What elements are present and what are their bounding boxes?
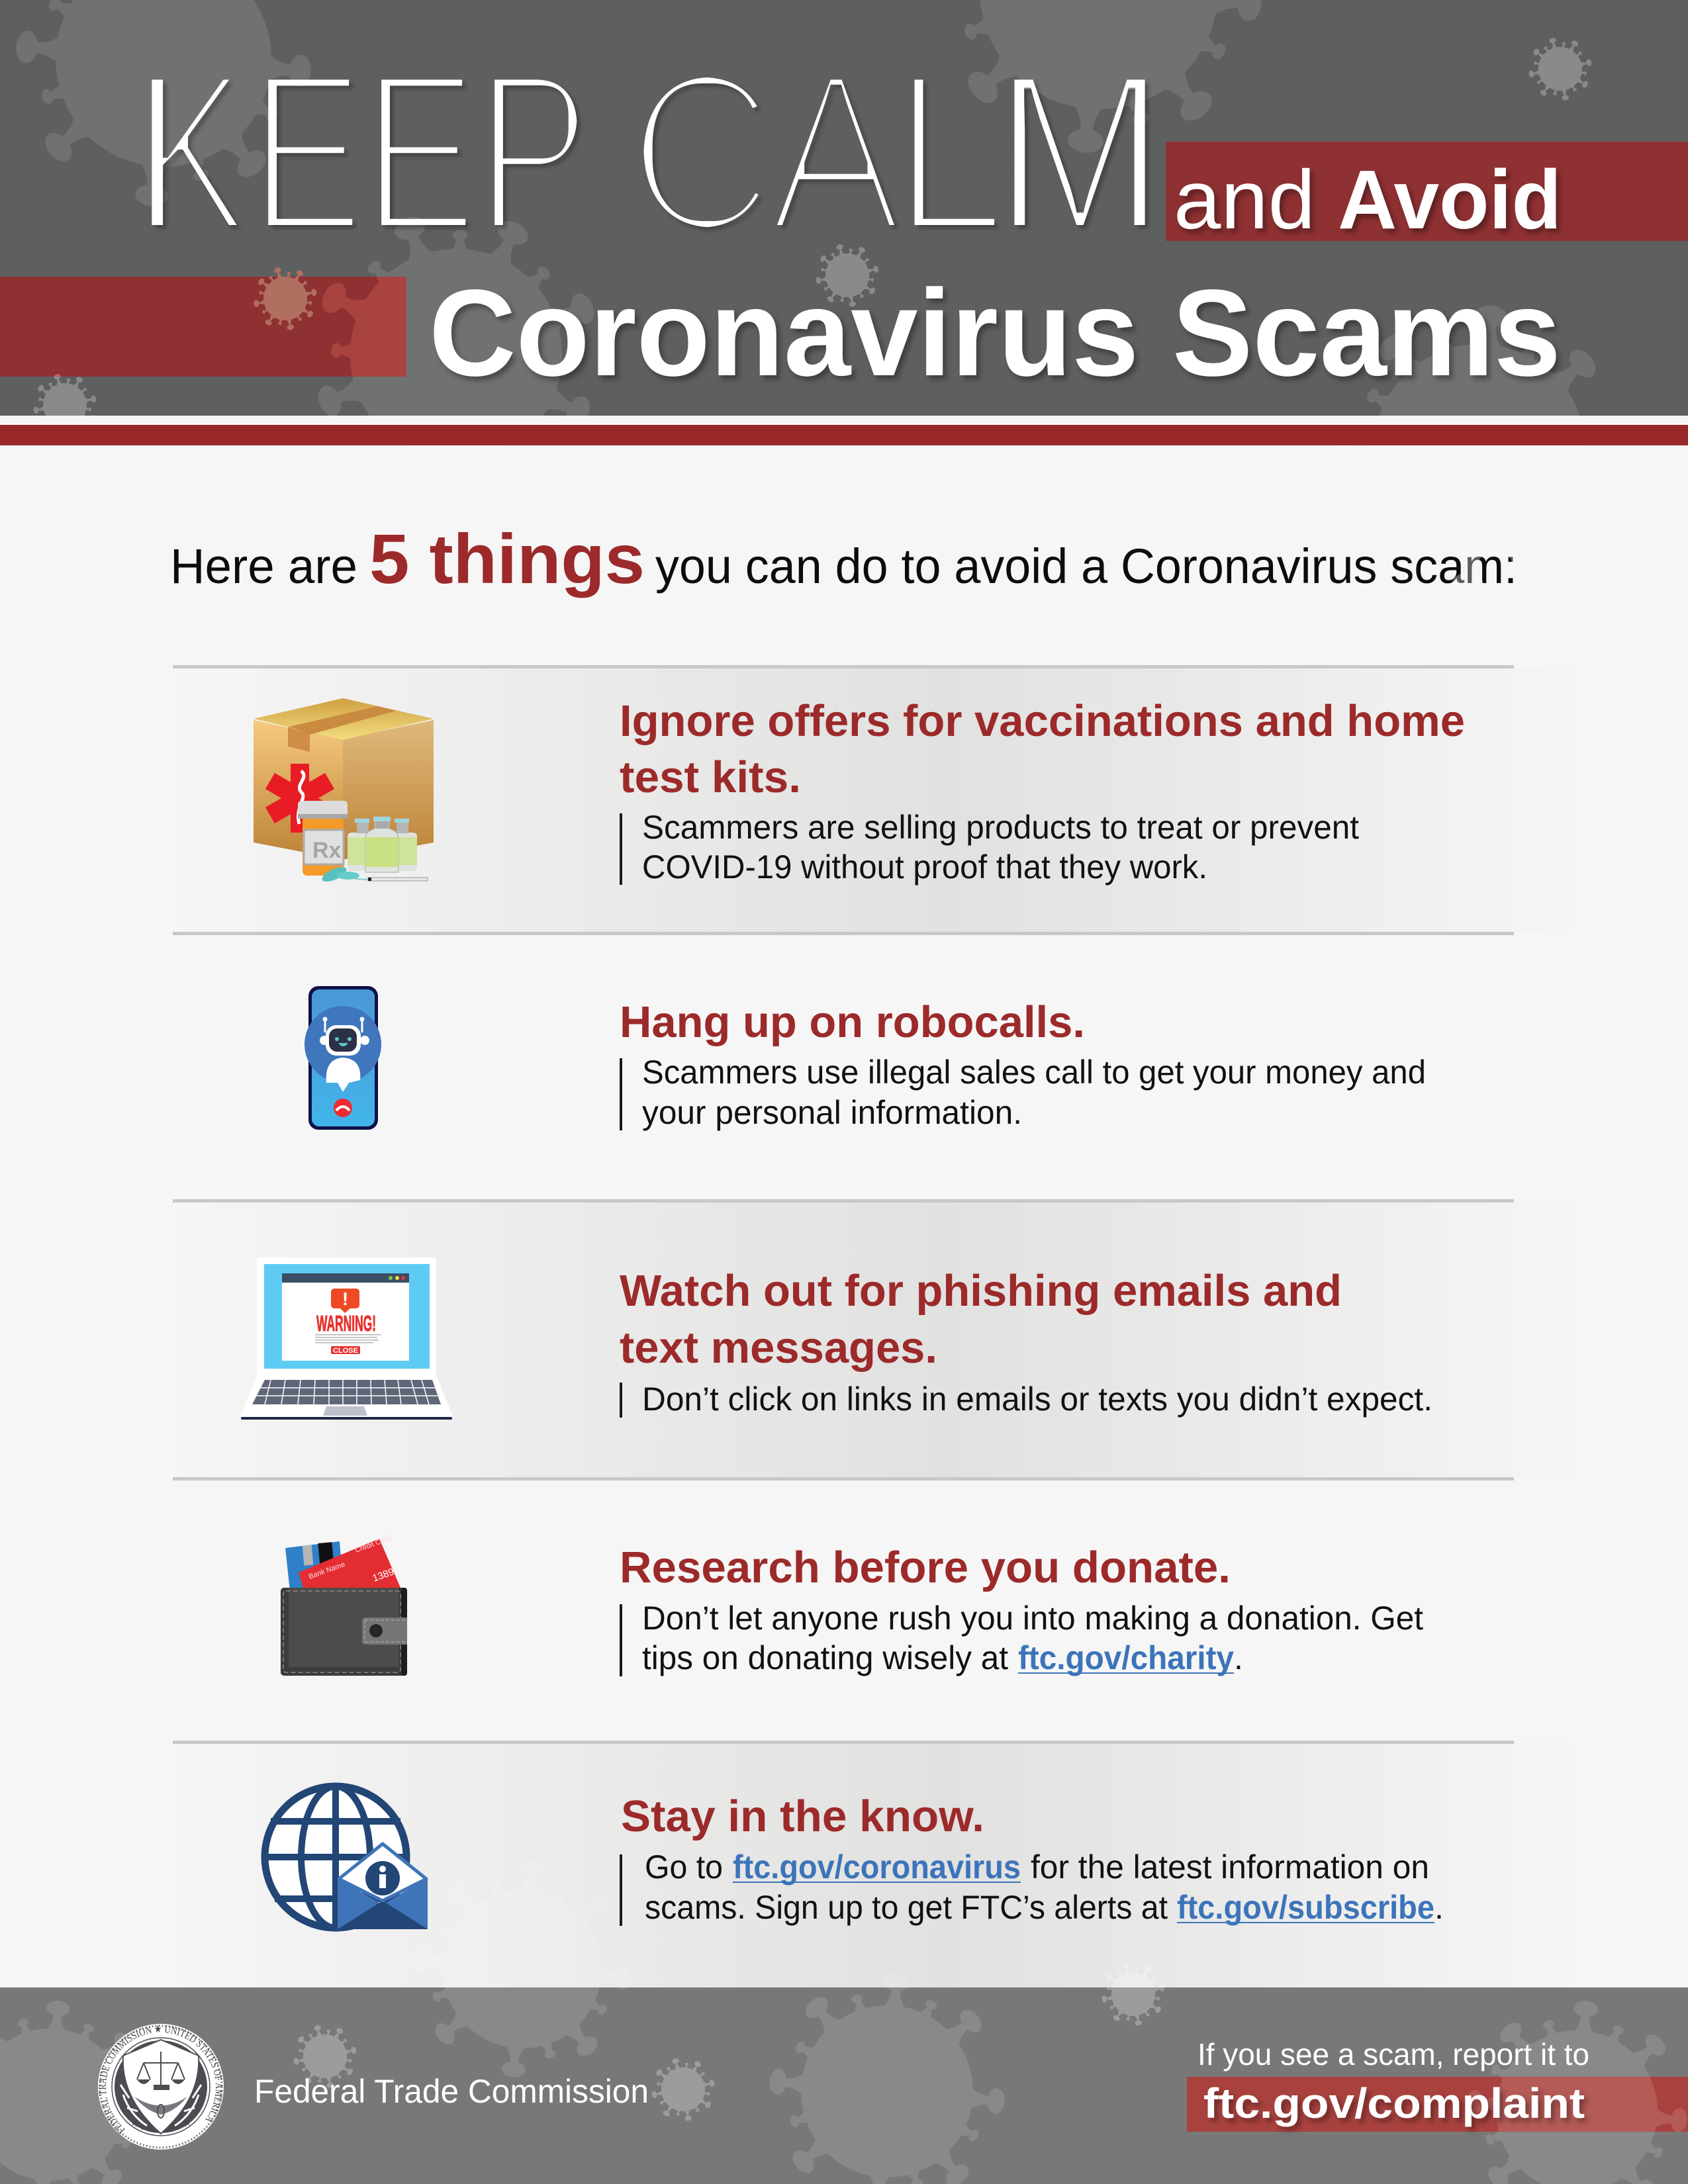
text block: tip 5: . xyxy=(1434,1889,1444,1926)
text block: tip 5: Go to xyxy=(645,1848,723,1886)
row divider lines xyxy=(173,665,1514,1744)
decorative virus shapes: header xyxy=(16,0,1595,416)
red banner left of "Coronavirus Scams" xyxy=(0,277,406,377)
footer: agency name: Federal Trade Commission xyxy=(254,2073,649,2110)
icon: laptop with warning window xyxy=(241,1257,452,1420)
title: and Avoid: and xyxy=(1174,153,1315,246)
icon: globe with info envelope xyxy=(261,1786,428,1929)
footer: FTC seal: ★ MCMXV ★ xyxy=(132,2120,190,2132)
icon: medical box with pills and vials xyxy=(254,698,434,885)
title: KEEP CALM: KEEP xyxy=(136,25,590,279)
decorative small virus over left red banner xyxy=(254,267,317,330)
text block: tip 1: Scammers are selling products to treat or prevent xyxy=(642,809,1359,846)
text block: tip 5 xyxy=(620,1848,1444,1926)
red banner behind "and Avoid" xyxy=(1166,142,1688,241)
text block: tip 4: ftc.gov/charity xyxy=(1018,1639,1234,1676)
text block: tip 5: ftc.gov/subscribe xyxy=(1177,1889,1434,1926)
decorative virus shapes: faint on white area xyxy=(1452,557,1513,583)
panel: tip 3 xyxy=(241,1257,1432,1420)
panel: tip 1 xyxy=(254,696,1465,886)
icon: laptop with warning window: ! xyxy=(342,1289,348,1309)
heading: tip 1: Ignore offers for vaccinations and home xyxy=(620,696,1465,746)
text block: tip 2: Scammers use illegal sales call to get your money and xyxy=(642,1054,1426,1091)
icon: laptop with warning window: WARNING! xyxy=(316,1311,376,1336)
icon: wallet with credit cards xyxy=(281,1534,407,1676)
intro sentence: you can do to avoid a Coronavirus scam: xyxy=(655,539,1517,594)
intro sentence xyxy=(170,520,1517,598)
footer background band xyxy=(0,1987,1688,2184)
text block: tip 4 xyxy=(620,1600,1423,1676)
red accent stripe under header xyxy=(0,425,1688,445)
text block: tip 1: COVID-19 without proof that they work. xyxy=(642,848,1207,886)
title: KEEP CALM: CALM xyxy=(628,25,1165,279)
heading: tip 5: Stay in the know. xyxy=(621,1792,984,1841)
footer: complaint link: ftc.gov/complaint xyxy=(1203,2079,1585,2127)
icon: laptop with warning window: CLOSE xyxy=(333,1347,358,1355)
panel backgrounds: shaded rows 1, 3 and 5 xyxy=(159,668,1589,1987)
text block: tip 3: Don’t click on links in emails or texts you didn’t expect. xyxy=(642,1381,1432,1418)
heading: tip 1: test kits. xyxy=(620,752,801,802)
footer: report prompt: If you see a scam, report it to xyxy=(1197,2037,1589,2071)
heading: tip 3: Watch out for phishing emails and xyxy=(620,1266,1342,1316)
panel: tip 5 xyxy=(261,1786,1444,1929)
heading: tip 3: text messages. xyxy=(620,1323,937,1373)
text block: tip 5: ftc.gov/coronavirus xyxy=(733,1848,1021,1886)
heading: tip 4: Research before you donate. xyxy=(620,1543,1231,1592)
icon: medical box with pills and vials: Rx xyxy=(312,838,342,863)
panel: tip 4 xyxy=(281,1534,1423,1676)
text block: tip 5: for the latest information on xyxy=(1031,1848,1429,1886)
decorative virus shapes: tinted inside left red banner xyxy=(322,277,406,377)
text block: tip 1 xyxy=(620,809,1359,886)
intro sentence: Here are xyxy=(170,539,357,594)
text block: tip 2 xyxy=(620,1054,1426,1131)
heading: tip 1 xyxy=(620,696,1465,802)
text block: tip 4: . xyxy=(1234,1639,1243,1676)
footer red banner xyxy=(1187,2077,1688,2132)
footer: FTC seal: FEDERAL TRADE COMMISSION ★ UNITED STATES OF AMERICA xyxy=(99,2025,224,2148)
title: and Avoid: Avoid xyxy=(1338,153,1562,246)
text block: tip 4: Don’t let anyone rush you into making a donation. Get xyxy=(642,1600,1423,1637)
title: KEEP CALM xyxy=(136,25,1165,279)
text block: tip 5: scams. Sign up to get FTC’s alerts at xyxy=(645,1889,1168,1926)
icon: phone with robot caller xyxy=(305,986,381,1130)
heading: tip 3 xyxy=(620,1266,1342,1373)
intro sentence: 5 things xyxy=(369,520,645,598)
icon: wallet with credit cards: Credit Card xyxy=(354,1534,392,1555)
icon: wallet with credit cards: Bank Name xyxy=(308,1561,346,1581)
text block: tip 2: your personal information. xyxy=(642,1094,1022,1131)
title: Coronavirus Scams: Coronavirus Scams xyxy=(429,265,1561,402)
icon: wallet with credit cards: 1389 xyxy=(371,1566,396,1584)
text block: tip 4: tips on donating wisely at xyxy=(642,1639,1008,1676)
heading: tip 2: Hang up on robocalls. xyxy=(620,997,1085,1047)
panel: tip 2 xyxy=(305,986,1426,1131)
header background band xyxy=(0,0,1688,416)
decorative virus shapes: footer xyxy=(0,1987,1687,2184)
title: and Avoid xyxy=(1174,153,1562,246)
